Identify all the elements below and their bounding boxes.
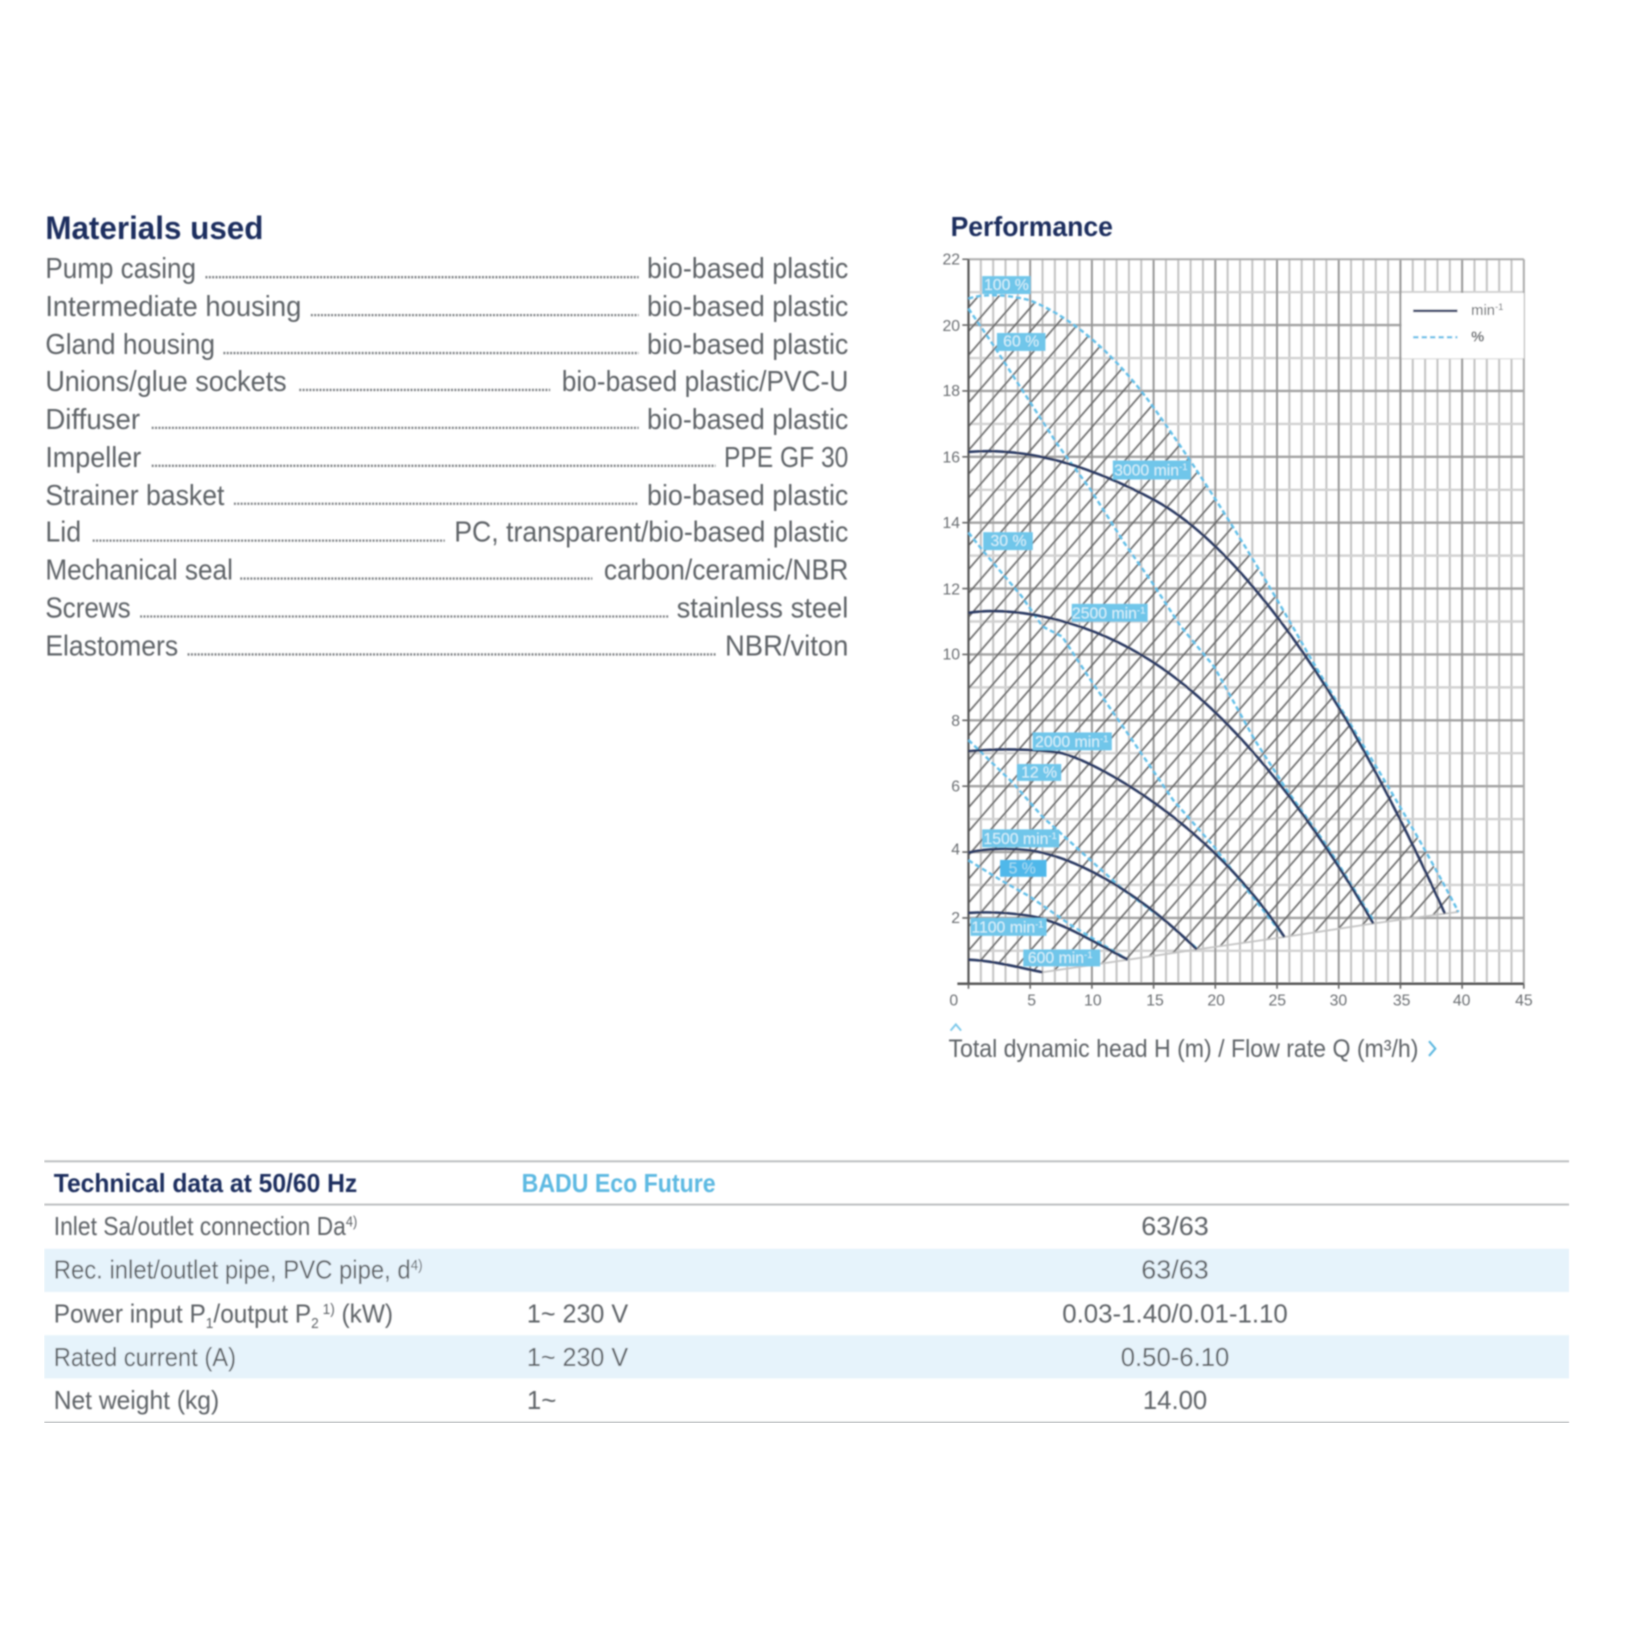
row: screws: Screws <box>45 593 131 625</box>
table rules <box>44 1161 1569 1423</box>
panel: technical data table <box>44 1161 1569 1423</box>
curve label: 5 %: 5 % <box>1009 861 1036 878</box>
curve label: 1500 rpm: -1 <box>1048 831 1057 842</box>
row: gland housing <box>45 329 848 361</box>
row: power input/output: Power input P <box>54 1299 218 1329</box>
row: lid: Lid <box>45 517 81 549</box>
curve label: 1100 rpm: 1100 min <box>971 920 1035 937</box>
icon: up chevron <box>951 1024 961 1031</box>
x axis labels: 10 <box>1084 992 1102 1009</box>
row: strainer basket: Strainer basket <box>45 480 225 512</box>
row: screws: stainless steel <box>677 593 848 625</box>
row: inlet/outlet connection: 63/63 <box>1141 1211 1209 1241</box>
row: mechanical seal: Mechanical seal <box>45 555 233 587</box>
x axis labels: 35 <box>1393 992 1411 1009</box>
y axis labels: 8 <box>951 713 960 730</box>
row: pump casing: bio-based plastic <box>647 253 848 285</box>
row: diffuser: bio-based plastic <box>647 404 848 436</box>
row: intermediate housing <box>45 291 848 323</box>
panel: performance chart <box>942 211 1533 1063</box>
row: unions/glue sockets <box>45 366 848 398</box>
row: impeller: PPE GF 30 <box>724 442 848 474</box>
curve label: 5 % <box>1000 860 1046 878</box>
row: power input/output: 1 <box>206 1316 213 1332</box>
y axis labels <box>942 252 960 927</box>
table header: BADU Eco Future <box>522 1168 716 1198</box>
row: lid: PC, transparent/bio-based plastic <box>454 517 848 549</box>
speed curves (solid) <box>968 451 1445 972</box>
y axis labels: 16 <box>942 450 960 467</box>
table header <box>54 1168 716 1198</box>
chart grid <box>968 259 1524 984</box>
row: unions/glue sockets: Unions/glue sockets <box>45 366 287 398</box>
efficiency curves (dashed) <box>968 295 1458 960</box>
panel: materials used <box>45 209 848 662</box>
row: net weight: Net weight (kg) <box>54 1385 219 1415</box>
row: impeller: Impeller <box>45 442 141 474</box>
curve label: 600 rpm: -1 <box>1084 950 1092 961</box>
legend: -1 <box>1495 302 1503 313</box>
x axis labels: 15 <box>1146 992 1164 1009</box>
x axis labels: 45 <box>1515 992 1533 1009</box>
row: net weight: 1~ <box>527 1385 556 1415</box>
row: diffuser: Diffuser <box>45 404 140 436</box>
heading: materials used: Materials used <box>45 209 263 246</box>
curve label: 3000 rpm: 3000 min <box>1114 462 1179 479</box>
curve label: 1100 rpm: -1 <box>1035 919 1044 930</box>
y axis labels: 4 <box>951 842 960 859</box>
row: power input/output: (kW) <box>335 1299 393 1329</box>
y axis labels: 20 <box>942 318 960 335</box>
curve label: 3000 rpm: -1 <box>1179 462 1188 473</box>
row: recommended pipe: 63/63 <box>1141 1254 1209 1284</box>
row: inlet/outlet connection <box>54 1211 1209 1241</box>
row: recommended pipe <box>54 1254 1209 1284</box>
row: inlet/outlet connection: Inlet Sa/outlet connection Da <box>54 1211 390 1241</box>
curve label: 30 %: 30 % <box>991 533 1027 550</box>
row: impeller <box>45 442 848 474</box>
y axis labels: 2 <box>951 910 960 927</box>
y axis labels: 22 <box>942 252 960 269</box>
row: power input/output: 0.03-1.40/0.01-1.10 <box>1062 1299 1288 1329</box>
row: strainer basket: bio-based plastic <box>647 480 848 512</box>
row: inlet/outlet connection: 4) <box>346 1215 357 1231</box>
curve label: 30 % <box>983 532 1033 550</box>
row: power input/output: /output P <box>213 1299 311 1329</box>
row: gland housing: bio-based plastic <box>647 329 848 361</box>
row: lid <box>45 517 848 549</box>
curve label: 2500 rpm: 2500 min <box>1072 606 1137 623</box>
curve label: 60 %: 60 % <box>1003 334 1039 351</box>
row: power input/output: 1~ 230 V <box>527 1299 629 1329</box>
x axis labels: 20 <box>1207 992 1225 1009</box>
row: diffuser <box>45 404 848 436</box>
table header: Technical data at 50/60 Hz <box>54 1168 357 1198</box>
legend: % <box>1471 329 1484 345</box>
row: pump casing: Pump casing <box>45 253 196 285</box>
row: rated current: 1~ 230 V <box>527 1342 629 1372</box>
curve label: 100 %: 100 % <box>984 277 1029 294</box>
y axis labels: 14 <box>942 515 960 532</box>
row: screws <box>45 593 848 625</box>
curve label: 2000 rpm: -1 <box>1100 734 1108 745</box>
x axis labels: 0 <box>949 992 958 1009</box>
y axis labels: 6 <box>951 778 960 795</box>
y axis labels: 10 <box>942 647 960 664</box>
row: gland housing: Gland housing <box>45 329 215 361</box>
curve label: 2000 rpm: 2000 min <box>1035 734 1100 751</box>
axis caption: Total dynamic head H (m) / Flow rate Q (m³/h) <box>948 1035 1418 1063</box>
x axis labels <box>949 992 1533 1009</box>
curve label: 12 %: 12 % <box>1021 765 1057 782</box>
x axis labels: 5 <box>1027 992 1036 1009</box>
curve label: 600 rpm: 600 min <box>1028 950 1084 967</box>
row: pump casing <box>45 253 848 285</box>
curve label: 1500 rpm: 1500 min <box>983 831 1048 848</box>
x axis labels: 25 <box>1268 992 1286 1009</box>
row: power input/output: 1) <box>319 1302 335 1318</box>
y axis labels: 18 <box>942 383 960 400</box>
row: mechanical seal <box>45 555 848 587</box>
lower limit line <box>1043 912 1458 972</box>
row: net weight <box>54 1385 1207 1415</box>
row: rated current: Rated current (A) <box>54 1342 236 1372</box>
row: elastomers: NBR/viton <box>725 630 848 662</box>
curve label: 2500 rpm: -1 <box>1137 605 1145 616</box>
row: intermediate housing: bio-based plastic <box>647 291 848 323</box>
table bands <box>44 1249 1569 1378</box>
x axis labels: 40 <box>1453 992 1471 1009</box>
hatched operating region <box>968 294 1458 970</box>
row: rated current: 0.50-6.10 <box>1121 1342 1229 1372</box>
row: elastomers: Elastomers <box>45 630 178 662</box>
row: rated current <box>54 1342 1229 1372</box>
row: elastomers <box>45 630 848 662</box>
row: intermediate housing: Intermediate housing <box>45 291 301 323</box>
legend <box>1402 293 1524 358</box>
row: unions/glue sockets: bio-based plastic/PVC-U <box>562 366 848 398</box>
legend: min <box>1471 303 1495 319</box>
row: power input/output <box>54 1299 1288 1332</box>
row: strainer basket <box>45 480 848 512</box>
chart axes and ticks <box>957 259 1524 989</box>
row: recommended pipe: Rec. inlet/outlet pipe, PVC pipe, d <box>54 1254 447 1284</box>
row: recommended pipe: 4) <box>411 1258 423 1274</box>
row: power input/output: 2 <box>311 1316 319 1332</box>
heading: performance: Performance <box>951 211 1113 242</box>
x axis labels: 30 <box>1330 992 1347 1009</box>
icon: right chevron <box>1429 1041 1435 1056</box>
row: mechanical seal: carbon/ceramic/NBR <box>604 555 848 587</box>
y axis labels: 12 <box>942 581 960 598</box>
row: net weight: 14.00 <box>1143 1385 1207 1415</box>
